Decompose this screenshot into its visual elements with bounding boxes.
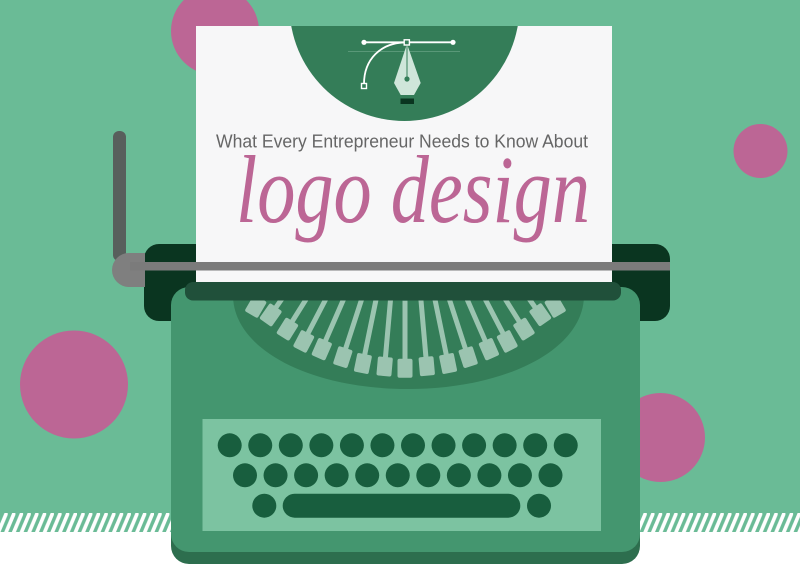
title script: logo design [236,136,590,243]
roller knob [112,253,145,287]
logo badge [291,26,518,121]
paper sheet [196,26,612,282]
paper rest bar [185,282,621,300]
typewriter base shadow [171,300,640,564]
pink circle: left [20,330,128,438]
key row 2 [233,463,562,487]
pink circle: right [734,124,788,178]
keyboard [202,419,601,531]
carriage back [144,244,670,321]
typewriter lever [113,131,126,261]
type basket well [233,295,584,389]
type bars and keys [245,285,566,378]
subtitle: What Every Entrepreneur Needs to Know About [216,132,588,152]
striped ground band [0,513,800,532]
key row 3 with space bar [252,494,551,518]
keyboard panel [202,419,601,531]
pink circle: top [171,0,259,75]
roller bar [130,262,670,270]
key row 1 [218,433,578,457]
icon: pen tool [348,40,460,104]
pink circle: lower right [616,393,705,482]
typewriter body [171,287,640,552]
semicircle [291,26,518,121]
